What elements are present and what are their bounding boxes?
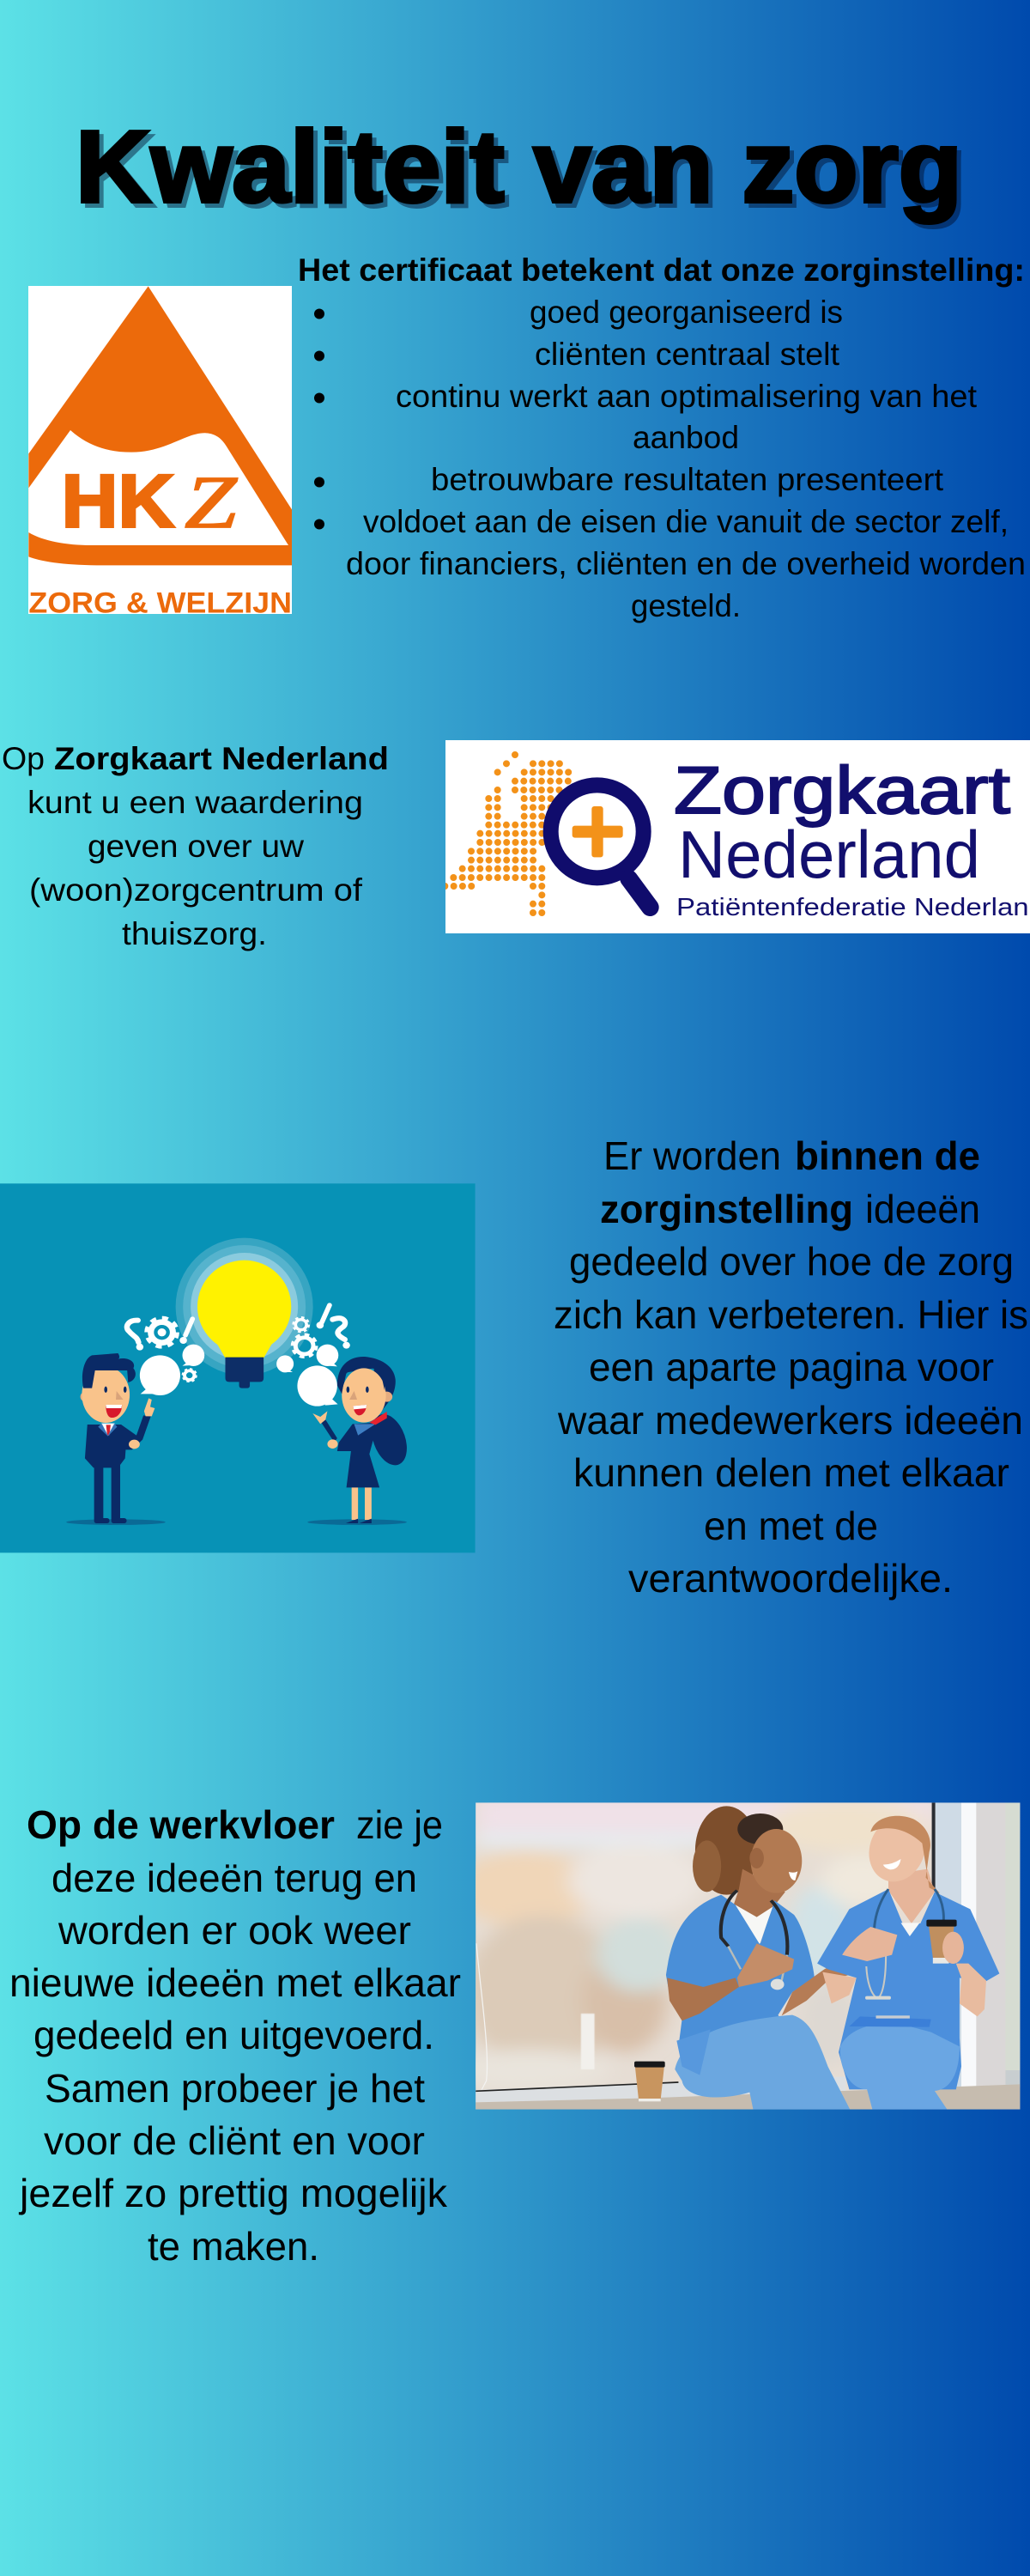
man presenting bbox=[66, 1353, 166, 1525]
coffee cup on sill bbox=[635, 2067, 664, 2099]
certificate bullet list bbox=[314, 295, 1026, 623]
work floor text block: worden er ook weer bbox=[58, 1908, 411, 1953]
certificate bullet list: continu werkt aan optimalisering van het bbox=[396, 379, 978, 414]
work floor text block: zie je bbox=[356, 1802, 443, 1847]
logo: Zorgkaart Nederland: Zorgkaart bbox=[674, 752, 1010, 828]
work floor text block: Samen probeer je het bbox=[45, 2066, 425, 2111]
logo: Zorgkaart Nederland bbox=[445, 740, 1030, 933]
ideas text block: Er worden bbox=[603, 1133, 781, 1178]
man's speech bubbles and symbols bbox=[127, 1318, 204, 1395]
woman presenting bbox=[307, 1357, 413, 1525]
work floor text block: nieuwe ideeën met elkaar bbox=[9, 1960, 461, 2005]
logo: Zorgkaart Nederland: Patiëntenfederatie Nederland bbox=[676, 894, 1030, 921]
logo: Zorgkaart Nederland: Nederland bbox=[678, 817, 980, 892]
ideas text block bbox=[554, 1133, 1028, 1601]
Zorgkaart text block: kunt u een waardering bbox=[27, 785, 363, 820]
Zorgkaart text block: thuiszorg. bbox=[122, 916, 267, 951]
title: Kwaliteit van zorg bbox=[76, 110, 962, 224]
ideas text block: binnen de bbox=[795, 1133, 980, 1178]
work floor text block: jezelf zo prettig mogelijk bbox=[18, 2171, 448, 2215]
right nurse bbox=[817, 1813, 999, 2110]
window frame and sill bbox=[932, 1802, 936, 1892]
blurred window background bbox=[447, 1797, 935, 2089]
ideas text block: zich kan verbeteren. Hier is bbox=[554, 1292, 1028, 1337]
icon: light bulb bbox=[176, 1238, 313, 1388]
work floor text block: Op de werkvloer bbox=[27, 1802, 335, 1847]
logo: HKZ zorg en welzijn bbox=[28, 286, 292, 619]
ideas text block: waar medewerkers ideeën bbox=[557, 1398, 1023, 1443]
certificate bullet list: voldoet aan de eisen die vanuit de sector zelf, bbox=[363, 504, 1009, 539]
Zorgkaart text block: Op bbox=[2, 741, 45, 776]
Zorgkaart text block: geven over uw bbox=[88, 829, 304, 864]
photo: two nurses talking at a window bbox=[447, 1797, 1020, 2110]
magnifier with plus bbox=[551, 785, 650, 908]
work floor text block: gedeeld en uitgevoerd. bbox=[33, 2013, 434, 2057]
Zorgkaart text block bbox=[2, 741, 389, 951]
work floor text block: deze ideeën terug en bbox=[52, 1856, 417, 1900]
certificate heading: Het certificaat betekent dat onze zorginstelling: bbox=[298, 252, 1025, 288]
ideas text block: gedeeld over hoe de zorg bbox=[569, 1239, 1014, 1284]
work floor text block bbox=[9, 1802, 461, 2269]
certificate bullet list: aanbod bbox=[633, 420, 739, 455]
map of dots bbox=[445, 755, 568, 913]
Zorgkaart text block: (woon)zorgcentrum of bbox=[29, 872, 363, 908]
certificate bullet list: door financiers, cliënten en de overheid worden bbox=[346, 546, 1026, 581]
certificate bullet list: betrouwbare resultaten presenteert bbox=[431, 462, 944, 497]
work floor text block: voor de cliënt en voor bbox=[44, 2118, 425, 2163]
ideas text block: een aparte pagina voor bbox=[589, 1345, 994, 1389]
ideas text block: kunnen delen met elkaar bbox=[573, 1450, 1009, 1495]
work floor text block: te maken. bbox=[148, 2224, 319, 2269]
logo: HKZ zorg en welzijn: ZORG & WELZIJN bbox=[28, 586, 292, 619]
logo: HKZ zorg en welzijn: Z bbox=[185, 460, 238, 544]
logo: HKZ zorg en welzijn: HK bbox=[62, 459, 174, 543]
ideas text block: en met de bbox=[704, 1504, 878, 1548]
illustration: colleagues sharing ideas bbox=[0, 1183, 476, 1552]
ideas text block: verantwoordelijke. bbox=[628, 1556, 953, 1601]
Zorgkaart text block: Zorgkaart Nederland bbox=[54, 741, 389, 776]
certificate bullet list: gesteld. bbox=[631, 588, 741, 623]
ideas text block: ideeën bbox=[865, 1187, 980, 1231]
certificate bullet list: cliënten centraal stelt bbox=[535, 337, 840, 372]
left nurse bbox=[666, 1806, 850, 2109]
woman's speech bubbles and symbols bbox=[276, 1305, 350, 1406]
certificate bullet list: goed georganiseerd is bbox=[530, 295, 843, 330]
ideas text block: zorginstelling bbox=[600, 1187, 853, 1231]
